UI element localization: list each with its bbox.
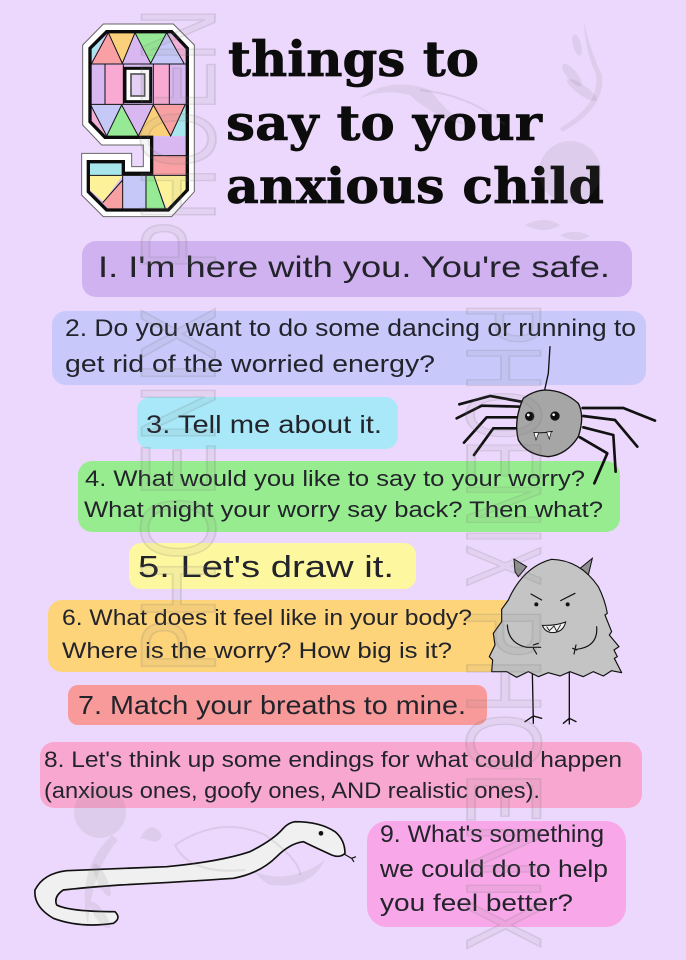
title: [226, 30, 604, 215]
item 8: (anxious ones, goofy ones, AND realistic ones).: [44, 778, 540, 803]
item 5: 5. Let's draw it.: [138, 549, 394, 584]
item 4: [78, 461, 620, 532]
item 4: 4. What would you like to say to your worry?: [85, 466, 585, 491]
item 8: 8. Let's think up some endings for what could happen: [44, 747, 622, 772]
icon: snake: [35, 822, 356, 925]
watermark: PHOENIX: [118, 307, 238, 673]
title: say to your: [226, 94, 543, 152]
item 2: get rid of the worried energy?: [65, 351, 435, 378]
item 3: 3. Tell me about it.: [146, 411, 382, 439]
item 6: [48, 600, 518, 672]
watermark: PHOENIX: [444, 303, 564, 587]
item 8: [40, 742, 642, 808]
icon: patterned number 9: [82, 24, 194, 217]
item 2: [52, 311, 646, 385]
item 4: What might your worry say back? Then what?: [84, 497, 603, 522]
item 9: 9. What's something: [380, 821, 604, 848]
item 7: [68, 685, 487, 725]
item 2: 2. Do you want to do some dancing or running to: [65, 315, 636, 342]
icon: spider: [457, 347, 655, 483]
item 1: I. I'm here with you. You're safe.: [98, 251, 610, 284]
icon: furry monster: [489, 558, 622, 724]
item 9: you feel better?: [380, 890, 573, 917]
item 1: [82, 241, 632, 297]
item 6: Where is the worry? How big is it?: [62, 638, 452, 663]
item 3: [137, 397, 398, 449]
watermark: [74, 8, 602, 950]
item 9: we could do to help: [379, 856, 608, 883]
item 9: [367, 821, 626, 927]
title: things to: [228, 30, 479, 88]
item 6: 6. What does it feel like in your body?: [62, 605, 472, 630]
title: anxious child: [226, 157, 604, 215]
item 7: 7. Match your breaths to mine.: [78, 690, 466, 720]
item 5: [129, 543, 416, 589]
